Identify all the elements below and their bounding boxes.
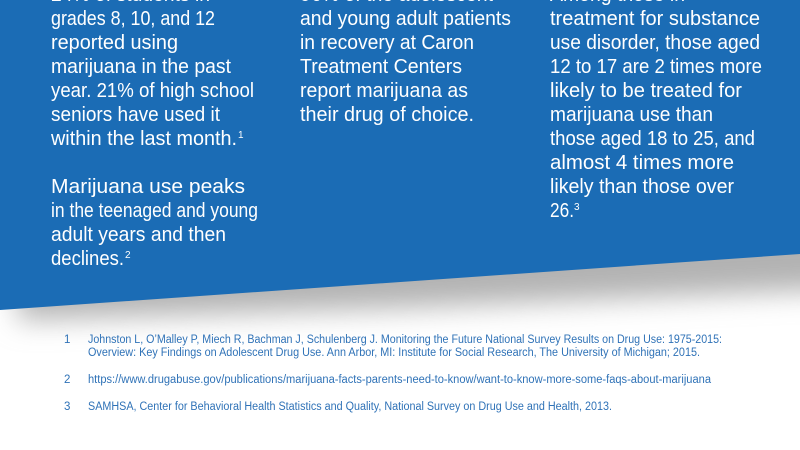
text column 1: student use: adult years and then: [51, 223, 226, 246]
text column 1: student use: 2: [125, 250, 131, 261]
footnote 2: 2: [64, 374, 70, 386]
footnote 2: https://www.drugabuse.gov/publications/marijuana-facts-parents-need-to-know/want-to-know-more-some-faqs-about-marijuana: [88, 374, 712, 386]
text column 3: treatment by age: those aged 18 to 25, and: [550, 127, 755, 150]
text column 3: treatment by age: use disorder, those aged: [550, 31, 760, 54]
text column 1: student use: declines.: [51, 247, 124, 270]
footnote 1: 1: [64, 334, 70, 346]
text column 1: student use: grades 8, 10, and 12: [51, 7, 215, 30]
text column 1: student use: marijuana in the past: [51, 55, 231, 78]
text column 2: Caron patients: and young adult patients: [300, 7, 511, 30]
footnote 3: SAMHSA, Center for Behavioral Health Statistics and Quality, National Survey on Drug Use and Health, 2013.: [88, 401, 612, 413]
text column 3: treatment by age: [550, 0, 762, 222]
footnote 1: Overview: Key Findings on Adolescent Drug Use. Ann Arbor, MI: Institute for Social Research, The University of Michigan; 2015.: [88, 347, 700, 359]
text column 1: student use: within the last month.: [50, 127, 237, 150]
text column 1: student use: 1: [238, 130, 244, 141]
footnote 1: [64, 334, 722, 359]
text column 3: treatment by age: likely than those over: [550, 175, 734, 198]
text column 1: student use: year. 21% of high school: [51, 79, 254, 102]
text column 1: student use: [50, 0, 258, 270]
text column 1: student use: Marijuana use peaks: [51, 175, 245, 198]
text column 2: Caron patients: report marijuana as: [300, 79, 468, 102]
text column 1: student use: seniors have used it: [51, 103, 220, 126]
text column 3: treatment by age: 26.: [550, 199, 574, 222]
text column 3: treatment by age: likely to be treated for: [550, 79, 742, 102]
text column 2: Caron patients: their drug of choice.: [300, 103, 474, 126]
footnotes: [64, 334, 722, 413]
text column 1: student use: reported using: [51, 31, 178, 54]
panel: blue statistics background: [0, 0, 800, 310]
text column 2: Caron patients: in recovery at Caron: [300, 31, 474, 54]
footnote 1: Johnston L, O’Malley P, Miech R, Bachman J, Schulenberg J. Monitoring the Future National Survey Results on Drug Use: 1975-2015:: [88, 334, 722, 346]
text column 3: treatment by age: marijuana use than: [550, 103, 713, 126]
text column 3: treatment by age: almost 4 times more: [550, 151, 734, 174]
text column 2: Caron patients: Treatment Centers: [300, 55, 462, 78]
text column 3: treatment by age: 3: [574, 202, 580, 213]
drop shadow under blue panel: [4, 254, 800, 336]
text column 1: student use: in the teenaged and young: [51, 199, 258, 222]
text column 3: treatment by age: treatment for substance: [550, 7, 760, 30]
text column 3: treatment by age: 12 to 17 are 2 times more: [550, 55, 762, 78]
footnote 3: 3: [64, 401, 70, 413]
text column 2: Caron patients: [300, 0, 511, 126]
